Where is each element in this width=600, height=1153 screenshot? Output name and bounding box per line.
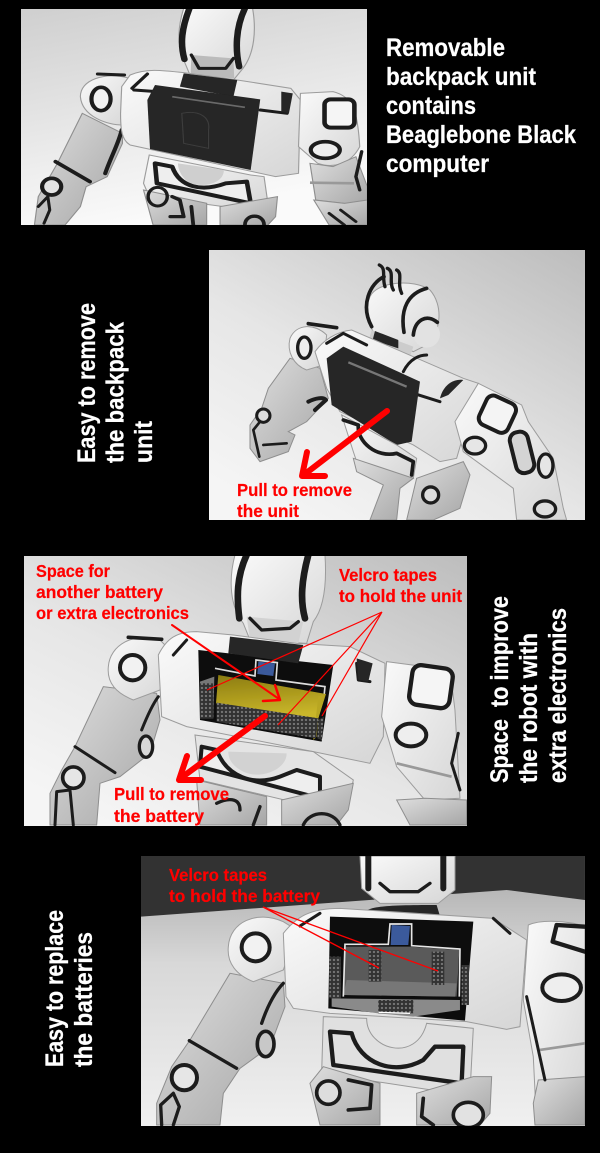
heading: space to improve [486,596,572,783]
callout: velcro tapes for battery: to hold the battery [169,886,320,906]
callout: velcro tapes for unit: Velcro tapes [339,565,437,585]
callout: spare space [36,564,188,620]
panel: robot with backpack attached [21,8,367,225]
callout: pull to remove battery: the battery [114,806,204,826]
callout: pull to remove the unit: the unit [237,501,299,521]
callout: velcro tapes for unit: to hold the unit [339,586,462,606]
heading: easy to remove backpack: unit [130,420,158,463]
heading: easy to replace [41,910,98,1067]
heading: easy to remove backpack [73,303,158,463]
callout: velcro tapes for battery [169,865,320,906]
heading: space to improve: the robot with [515,633,543,783]
callout: pull to remove the unit: Pull to remove [237,480,352,500]
callout: spare space: Space for [36,561,110,581]
arrow: velcro pointers to battery bay [263,907,438,971]
heading: space to improve: Space to improve [486,596,514,783]
callout: spare space: another battery [36,582,163,602]
heading: easy to remove backpack: the backpack [102,322,130,463]
heading: backpack unit: contains [386,92,476,120]
arrow: velcro tape pointers [207,612,382,725]
heading: easy to replace: Easy to replace [41,910,69,1067]
panel: pulling the backpack off [209,250,585,521]
heading: space to improve: extra electronics [544,608,572,783]
callout: pull to remove the unit [237,482,352,518]
heading: backpack unit: Removable [386,34,505,62]
heading: easy to replace: the batteries [70,932,98,1067]
callout: velcro tapes for unit [339,568,462,602]
callout: pull to remove battery [114,784,229,826]
heading: backpack unit [386,34,576,178]
callout: spare space: or extra electronics [36,603,189,623]
heading: backpack unit: Beaglebone Black [386,121,576,149]
panel: empty battery bay [141,856,585,1128]
heading: backpack unit: computer [386,150,489,178]
callout: pull to remove battery: Pull to remove [114,784,229,804]
callout: velcro tapes for battery: Velcro tapes [169,865,267,885]
arrow: pull to remove battery [179,716,265,780]
panel: battery compartment [24,555,467,826]
arrow: pointer to spare space [172,625,280,701]
arrow: pull to remove unit [302,411,387,476]
heading: easy to remove backpack: Easy to remove [73,303,101,463]
heading: backpack unit: backpack unit [386,63,537,91]
